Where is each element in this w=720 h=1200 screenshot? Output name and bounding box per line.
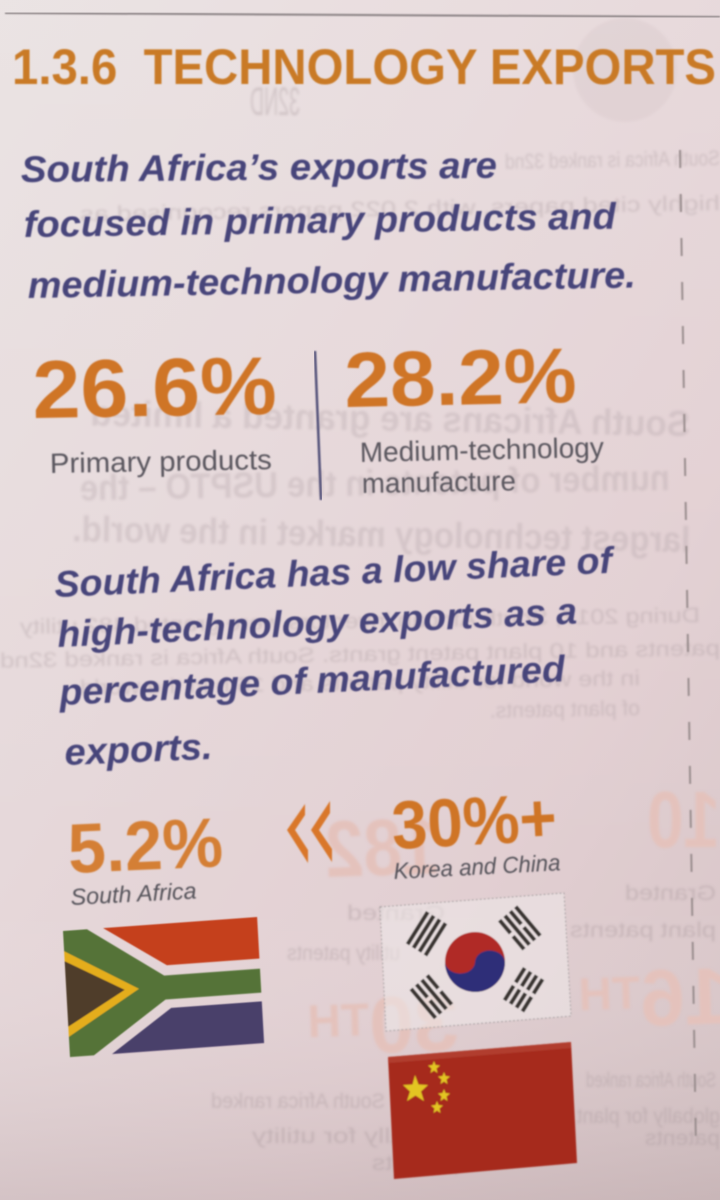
show-through text from reverse page: highly cited papers, with 2 022 papers recognised as bbox=[80, 192, 720, 226]
show-through statistics from reverse page: globally for plant bbox=[577, 1105, 720, 1128]
show-through text from reverse page: number of patents in the USPTO – the bbox=[80, 457, 670, 508]
text block: low share of high-technology exports: exports. bbox=[64, 726, 213, 773]
stat: South Africa 5.2%: 5.2% bbox=[66, 803, 225, 888]
show-through statistics from reverse page bbox=[211, 775, 720, 1175]
stat: medium-technology manufacture: manufacture bbox=[362, 465, 516, 499]
show-through text from reverse page: South Africa is ranked 32nd bbox=[505, 147, 720, 174]
show-through statistics from reverse page: 10 bbox=[647, 775, 720, 864]
show-through statistics from reverse page: Granted bbox=[347, 902, 445, 925]
stat: Korea and China 30%+: 30%+ bbox=[390, 779, 559, 864]
show-through text from reverse page bbox=[0, 80, 720, 723]
show-through statistics from reverse page: 182 bbox=[324, 801, 442, 894]
show-through statistics from reverse page: globally for utility bbox=[251, 1125, 459, 1148]
icon: double chevron much less than bbox=[287, 801, 332, 863]
taegeuk emblem bbox=[444, 931, 506, 993]
trigram upper right bbox=[498, 905, 542, 951]
show-through statistics from reverse page: 30 bbox=[368, 978, 460, 1070]
show-through statistics from reverse page: patents bbox=[645, 1127, 720, 1150]
show-through statistics from reverse page: South Africa ranked bbox=[211, 1090, 385, 1113]
show-through text from reverse page: patents and 10 plant patent grants. South Africa is ranked 32nd bbox=[0, 637, 720, 673]
stat: primary products: Primary products bbox=[50, 444, 272, 479]
text block: low share of high-technology exports: South Africa has a low share of bbox=[54, 540, 617, 605]
top rule bbox=[5, 13, 720, 17]
show-through text from reverse page: 32ND bbox=[250, 80, 300, 124]
show-through statistics from reverse page: patents bbox=[372, 1152, 459, 1175]
text block: primary and medium-technology focus bbox=[21, 145, 636, 306]
text block: primary and medium-technology focus: South Africa’s exports are bbox=[21, 145, 497, 190]
show-through text from reverse page: During 2017, South African inventors were granted 482 utility bbox=[19, 604, 700, 639]
stat: primary products bbox=[32, 341, 277, 479]
text block: low share of high-technology exports: high-technology exports as a bbox=[57, 590, 578, 655]
show-through text from reverse page: of plant patents. bbox=[490, 697, 640, 723]
icon: South Korea flag bbox=[380, 893, 571, 1031]
show-through text from reverse page: largest technology market in the world. bbox=[72, 508, 691, 560]
text block: primary and medium-technology focus: focused in primary products and bbox=[24, 196, 617, 245]
divider bbox=[315, 351, 321, 500]
icon: South Africa flag bbox=[63, 917, 264, 1057]
text block: low share of high-technology exports: percentage of manufactured bbox=[57, 648, 567, 713]
stat: medium-technology manufacture: 28.2% bbox=[344, 331, 577, 424]
show-through statistics from reverse page: utility patents bbox=[287, 942, 400, 965]
show-through statistics from reverse page: plant patents bbox=[570, 919, 716, 942]
show-through statistics from reverse page: TH bbox=[578, 966, 641, 1020]
trigram upper left bbox=[406, 911, 447, 956]
show-through statistics from reverse page: Granted bbox=[625, 882, 716, 905]
stat: medium-technology manufacture bbox=[344, 331, 604, 499]
show-through statistics from reverse page: TH bbox=[307, 993, 370, 1047]
show-through text from reverse page: South Africans are granted a limited bbox=[90, 393, 691, 444]
show-through statistics from reverse page: South Africa ranked bbox=[586, 1069, 716, 1092]
stat: Korea and China 30%+: Korea and China bbox=[393, 849, 561, 884]
stat: medium-technology manufacture: Medium-technology bbox=[359, 432, 604, 468]
text block: primary and medium-technology focus: medium-technology manufacture. bbox=[27, 254, 636, 306]
stat: South Africa 5.2%: South Africa bbox=[70, 877, 197, 910]
icon: China flag bbox=[388, 1042, 577, 1179]
text block: low share of high-technology exports bbox=[54, 540, 617, 773]
stat: primary products: 26.6% bbox=[32, 341, 277, 436]
trigram lower right bbox=[503, 967, 544, 1012]
trigram lower left bbox=[410, 974, 453, 1019]
show-through text from reverse page: in the world for utility patents and 16th in the world bbox=[80, 667, 640, 700]
dashed margin line bbox=[680, 150, 696, 1150]
